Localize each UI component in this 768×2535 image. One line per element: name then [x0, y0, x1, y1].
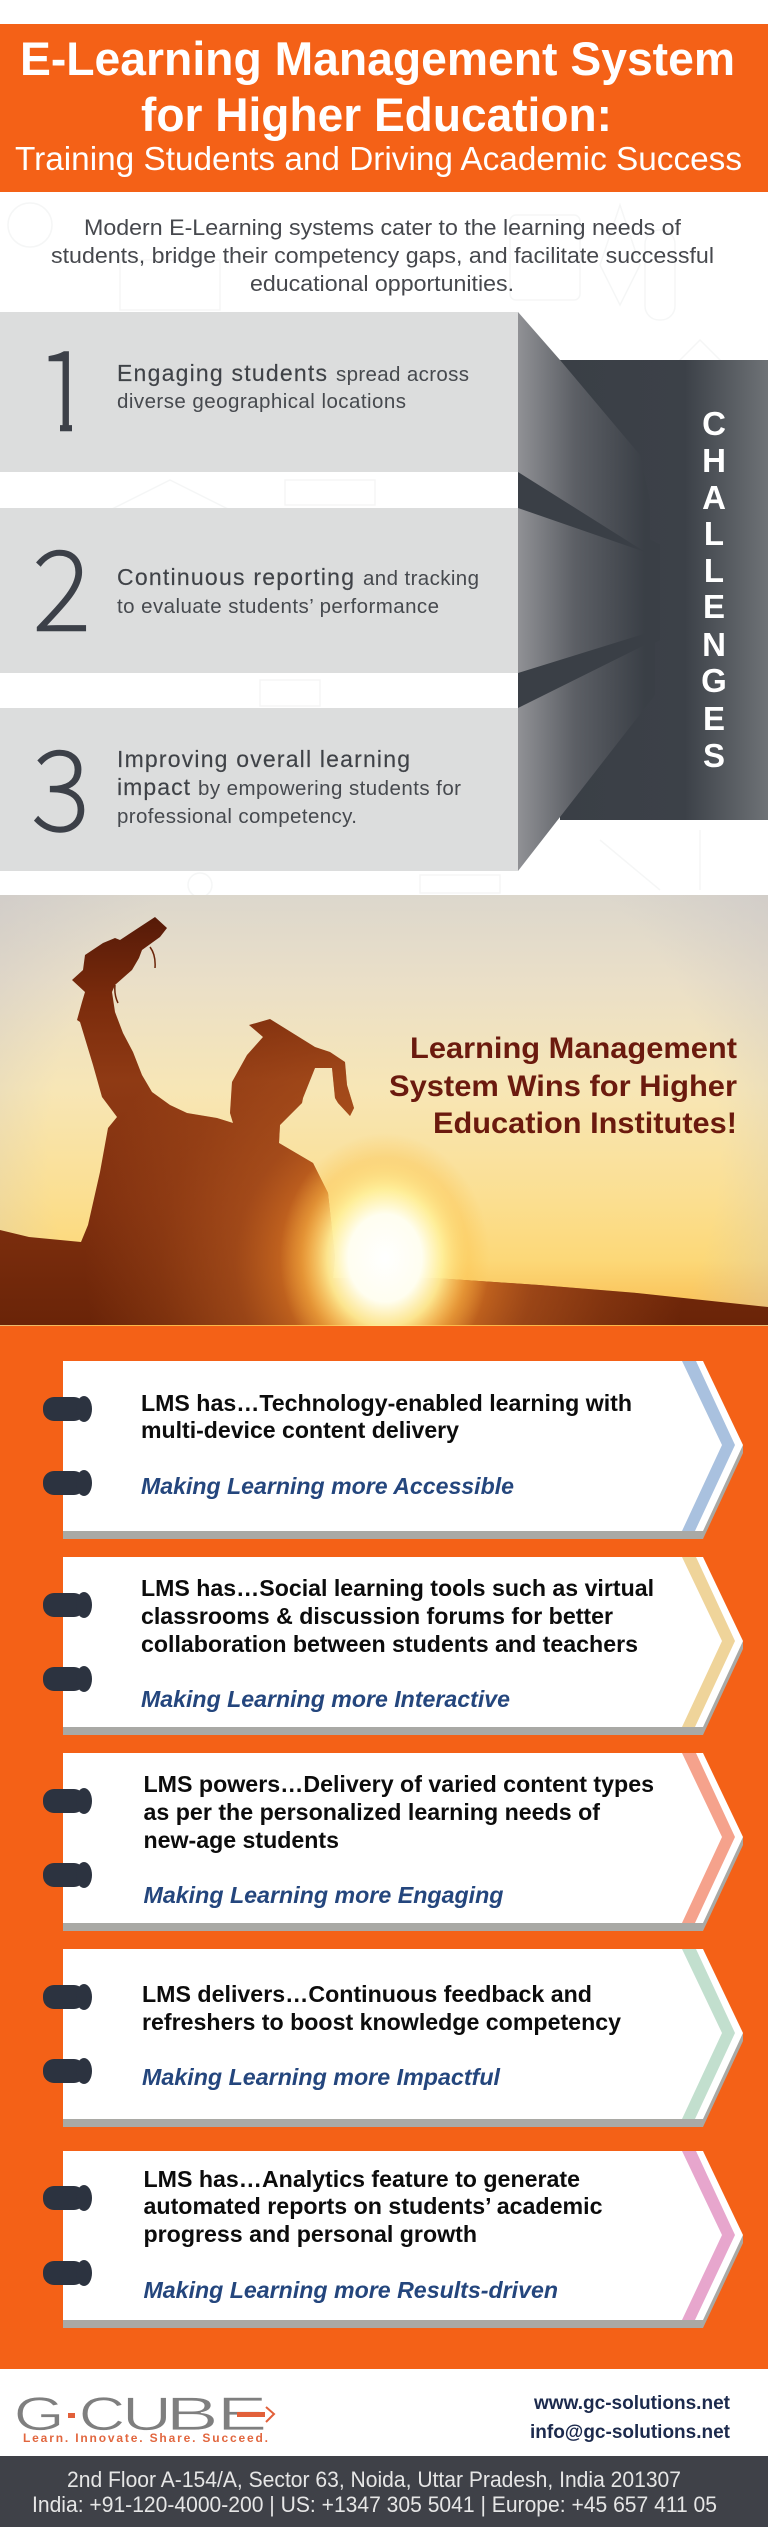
footer address bar: 2nd Floor A-154/A, Sector 63, Noida, Uttar Pradesh, India 201307 [67, 2467, 681, 2492]
challenge 2 text: to evaluate students’ performance [117, 595, 439, 618]
panel: challenge 2 [0, 502, 518, 673]
card text: LMS powers…Delivery of varied content types [144, 1771, 654, 1797]
photo heading: Education Institutes! [433, 1107, 737, 1140]
challenges vertical label: N [702, 626, 726, 663]
logo arrow [237, 2407, 274, 2422]
card text: Making Learning more Accessible [141, 1473, 514, 1499]
binder rings [43, 2185, 92, 2286]
card text: classrooms & discussion forums for better [141, 1603, 613, 1629]
card text: LMS has…Technology-enabled learning with [141, 1390, 632, 1416]
number 3: 3 [32, 702, 89, 862]
contact details: www.gc-solutions.net [533, 2392, 730, 2414]
card text: progress and personal growth [144, 2221, 477, 2247]
panel: challenge 3 [0, 702, 518, 871]
card text: Making Learning more Interactive [141, 1686, 510, 1712]
card text: LMS delivers…Continuous feedback and [142, 1981, 592, 2007]
logo: G-Cube: B [166, 2388, 219, 2440]
footer address bar: India: +91-120-4000-200 | US: +1347 305 5041 | Europe: +45 657 411 05 [32, 2492, 717, 2517]
contact details [530, 2392, 730, 2443]
sun glow [280, 1133, 490, 1383]
card: impactful [43, 1949, 743, 2127]
card text: LMS has…Social learning tools such as virtual [141, 1575, 654, 1601]
title [20, 32, 735, 141]
challenge 2 text: and tracking [363, 567, 479, 590]
binder rings [43, 1984, 92, 2084]
photo heading: System Wins for Higher [389, 1070, 737, 1103]
diploma ribbon [115, 947, 155, 1003]
challenge 2 text: Continuous reporting [117, 564, 354, 590]
card text: collaboration between students and teachers [141, 1631, 638, 1657]
card text: Making Learning more Engaging [144, 1882, 504, 1908]
challenge 3 text: Improving overall learning [117, 746, 410, 772]
card text [142, 1981, 621, 2090]
intro text: Modern E-Learning systems cater to the learning needs of [84, 215, 682, 240]
title: for Higher Education: [141, 88, 612, 141]
challenges banner [518, 312, 768, 871]
challenge 3 text: professional competency. [117, 805, 357, 828]
logo: G-Cube: G [14, 2388, 65, 2441]
intro text: students, bridge their competency gaps, and facilitate successful [51, 243, 714, 268]
header banner [0, 24, 768, 192]
challenge 1 text: spread across [336, 363, 469, 386]
card text: new-age students [144, 1827, 339, 1853]
logo: G-Cube [14, 2387, 274, 2445]
card text: automated reports on students’ academic [144, 2193, 603, 2219]
card: accessible [43, 1361, 743, 1539]
graduate silhouette and hills [0, 917, 768, 1325]
challenge 2 text [117, 564, 479, 618]
challenge 1 text: diverse geographical locations [117, 390, 406, 413]
photo heading [389, 1032, 737, 1140]
logo: G-Cube: E [217, 2388, 267, 2440]
challenge 1 text: Engaging students [117, 360, 327, 386]
card text: multi-device content delivery [141, 1417, 459, 1443]
card text: Making Learning more Results-driven [144, 2277, 558, 2303]
challenges vertical label: L [704, 515, 724, 552]
number 1: 1 [35, 302, 92, 462]
panel: orange benefits section [0, 1326, 768, 2369]
card text: as per the personalized learning needs of [144, 1799, 600, 1825]
challenges vertical label: S [703, 737, 725, 774]
photo: graduate at sunset [0, 895, 768, 1326]
challenges vertical label [701, 405, 727, 774]
card: results-driven [43, 2151, 743, 2328]
contact details: info@gc-solutions.net [530, 2421, 730, 2443]
challenge 3 text: impact [117, 774, 191, 800]
challenge 3 text: by empowering students for [198, 777, 461, 800]
card text: Making Learning more Impactful [142, 2064, 501, 2090]
intro text: educational opportunities. [250, 271, 514, 296]
card: engaging [43, 1753, 743, 1931]
card text [141, 1575, 654, 1712]
card text [144, 1771, 654, 1908]
binder rings [43, 1396, 92, 1496]
number 2: 2 [33, 502, 90, 662]
logo tagline: Learn. Innovate. Share. Succeed. [23, 2431, 268, 2445]
challenges vertical label: L [704, 552, 724, 589]
binder rings [43, 1788, 92, 1888]
card text: refreshers to boost knowledge competency [142, 2009, 621, 2035]
card: interactive [43, 1557, 743, 1735]
challenges vertical label: A [702, 479, 726, 516]
challenges vertical label: C [702, 405, 726, 442]
challenge 1 text [117, 360, 469, 413]
card text: LMS has…Analytics feature to generate [144, 2166, 580, 2192]
challenges vertical label: E [703, 588, 725, 625]
photo heading: Learning Management [410, 1032, 737, 1065]
challenges vertical label: E [703, 700, 725, 737]
subtitle: Training Students and Driving Academic Success [15, 140, 742, 177]
binder rings [43, 1592, 92, 1692]
logo: G-Cube: U [122, 2388, 172, 2440]
intro text [51, 215, 714, 296]
card text [141, 1390, 632, 1499]
challenges vertical label: H [702, 442, 726, 479]
panel: challenge 1 [0, 302, 518, 472]
card text [144, 2166, 603, 2303]
challenges vertical label: G [701, 662, 727, 699]
title: E-Learning Management System [20, 32, 735, 85]
logo: G-Cube: C [79, 2387, 125, 2440]
footer address bar [0, 2456, 768, 2527]
challenge 3 text [117, 746, 461, 828]
